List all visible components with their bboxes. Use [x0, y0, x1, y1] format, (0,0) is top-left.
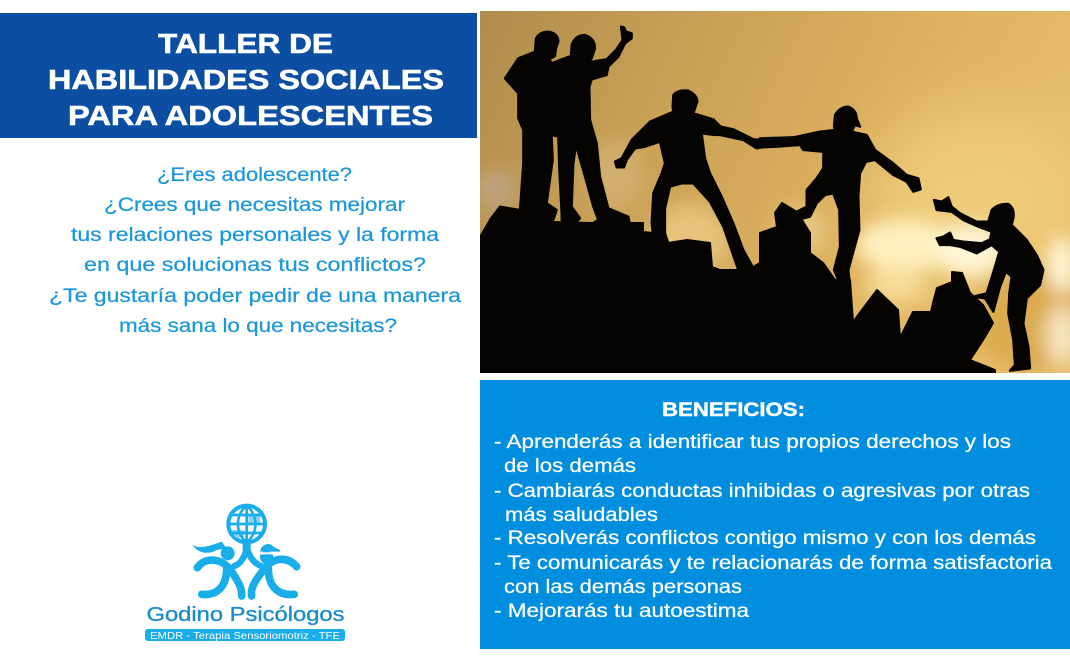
title: PARA ADOLESCENTES [68, 100, 433, 131]
icon: girl head and ponytail [192, 542, 235, 560]
questions text block: ¿Eres adolescente? [157, 165, 352, 186]
rocky mountain [480, 203, 995, 373]
benefits list: con las demás personas [504, 577, 742, 598]
logo name: Godino Psicólogos [146, 604, 344, 626]
icon: globe [228, 506, 265, 542]
benefits panel [480, 380, 1070, 649]
questions text block: ¿Te gustaría poder pedir de una manera [49, 286, 462, 307]
title banner [0, 13, 477, 138]
benefits list [494, 432, 1052, 622]
logo tagline pill: EMDR - Terapia Sensoriomotriz - TFE [150, 630, 340, 642]
person 1 and person 2 with thumb up [490, 27, 632, 227]
questions text block [49, 165, 462, 337]
benefits list: - Mejorarás tu autoestima [494, 601, 750, 622]
person 5 [934, 197, 1043, 371]
person 3 [615, 90, 770, 273]
questions text block: tus relaciones personales y la forma [71, 225, 440, 246]
person 4 [760, 107, 921, 280]
benefits list: - Te comunicarás y te relacionarás de forma satisfactoria [494, 553, 1052, 574]
icon: three linked figures [197, 543, 297, 596]
benefits list: más saludables [505, 505, 658, 526]
questions text block: en que solucionas tus conflictos? [84, 255, 426, 276]
questions text block: más sana lo que necesitas? [119, 316, 397, 337]
benefits list: - Resolverás conflictos contigo mismo y con los demás [494, 528, 1036, 549]
logo symbol [192, 506, 297, 596]
title [48, 28, 444, 131]
benefits heading: BENEFICIOS: [662, 400, 805, 421]
photo: silhouettes helping each other climb at sunset [473, 11, 1070, 373]
icon: boy head and cap [260, 544, 280, 564]
title: TALLER DE [158, 28, 333, 59]
benefits list: de los demás [504, 456, 636, 477]
title: HABILIDADES SOCIALES [48, 64, 444, 95]
logo: Godino Psicólogos [145, 506, 345, 642]
benefits list: - Aprenderás a identificar tus propios derechos y los [494, 432, 1011, 453]
benefits list: - Cambiarás conductas inhibidas o agresivas por otras [494, 481, 1030, 502]
questions text block: ¿Crees que necesitas mejorar [104, 195, 406, 216]
